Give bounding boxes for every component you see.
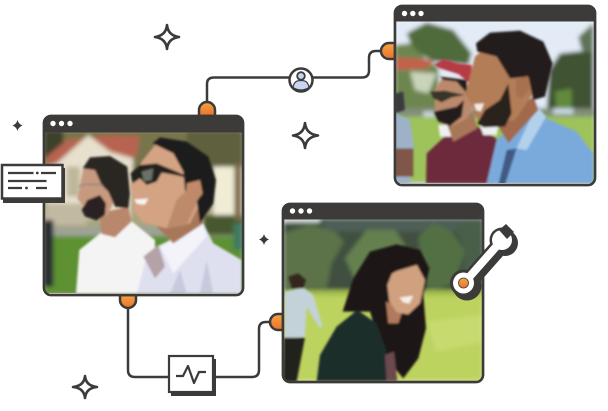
sparkle: bottom left bbox=[73, 376, 97, 398]
icon: wrench bbox=[450, 224, 518, 300]
node: left window bottom bbox=[120, 295, 136, 308]
woman face bbox=[387, 264, 425, 314]
window dots bbox=[402, 11, 424, 16]
woman neck bbox=[386, 302, 403, 323]
background man bbox=[285, 288, 323, 338]
window: top-right photo bbox=[395, 6, 595, 187]
window: bottom photo bbox=[283, 204, 483, 382]
wrench orange bolt bbox=[458, 278, 468, 288]
woman hair back bbox=[343, 244, 429, 378]
icon: document card bbox=[2, 165, 65, 203]
front man face bbox=[131, 143, 202, 228]
sparkle: top center bbox=[155, 25, 179, 49]
sparkle: center bbox=[293, 123, 318, 148]
title bar bbox=[283, 204, 483, 219]
sparkle: small center bbox=[259, 234, 269, 245]
smile bbox=[134, 199, 148, 205]
front man shirt bbox=[137, 223, 242, 293]
node: left window top bbox=[199, 102, 215, 116]
front man face bbox=[464, 51, 534, 122]
woman jacket bbox=[317, 310, 387, 381]
photo: laughing woman in a park bbox=[283, 218, 483, 382]
cap man body bbox=[426, 126, 498, 183]
photo: two men in sunglasses and white shirts bbox=[43, 130, 243, 297]
front man hair bbox=[153, 137, 216, 223]
photo: two smiling men outdoors bbox=[395, 20, 595, 187]
wrench body bbox=[464, 240, 502, 283]
back man bbox=[76, 220, 155, 293]
front man beard bbox=[477, 83, 512, 127]
wrench shadow and outline bbox=[450, 228, 518, 300]
sunglasses bbox=[131, 163, 194, 185]
fringe bbox=[390, 262, 418, 274]
front man shirt bbox=[485, 116, 594, 183]
far-left person bbox=[395, 113, 414, 183]
front man neck bbox=[157, 207, 203, 243]
smile bbox=[399, 296, 413, 304]
title bar bbox=[395, 6, 595, 21]
node: top-right window bbox=[381, 43, 395, 59]
title bar bbox=[44, 116, 243, 132]
icon: pulse chart box bbox=[169, 356, 216, 396]
teeth bbox=[474, 103, 484, 112]
front man hair bbox=[476, 31, 553, 100]
front man neck bbox=[497, 97, 538, 143]
window dots bbox=[290, 208, 312, 214]
connector: left window to top-right window bbox=[207, 51, 384, 104]
node: bottom window bbox=[270, 314, 283, 330]
window dots bbox=[50, 121, 73, 126]
icon: user badge bbox=[290, 68, 312, 92]
connector: left window to bottom window bbox=[128, 305, 274, 377]
ear bbox=[186, 180, 203, 203]
ear bbox=[516, 76, 529, 99]
window: left photo bbox=[43, 116, 243, 297]
sparkle: small left bbox=[12, 120, 22, 131]
wrench jaw notch bbox=[499, 224, 514, 239]
